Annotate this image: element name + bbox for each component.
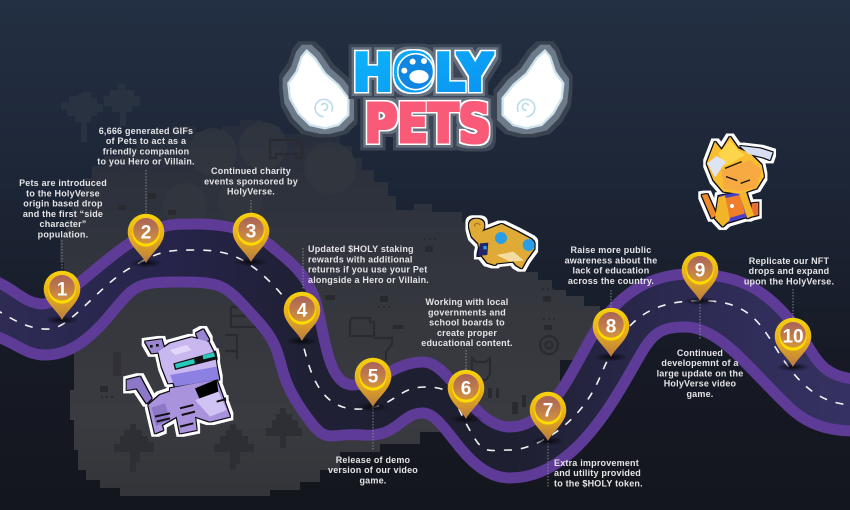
- pin 8: [593, 308, 629, 362]
- milestone 6 text: governments and: [428, 307, 506, 317]
- road lower edge: [0, 282, 850, 478]
- road centre dashes: [0, 250, 850, 451]
- milestone 2 text: friendly companion: [103, 146, 189, 156]
- dotted leader lines: [62, 170, 793, 488]
- milestone 1 text: Pets are introduced: [19, 178, 107, 188]
- pin 9: [682, 252, 718, 306]
- milestone 8 text: awareness about the: [565, 255, 657, 265]
- pin 6: [448, 370, 484, 424]
- milestone 2 text: 6,666 generated GIFs: [99, 126, 193, 136]
- lower trees: [114, 408, 302, 472]
- milestone 3 text: Continued charity: [211, 166, 291, 176]
- small pixel marks: [100, 193, 555, 414]
- ghost icon: [350, 318, 374, 336]
- pin 6: 6: [461, 378, 471, 400]
- pin 5: 5: [368, 366, 379, 388]
- logo wordmark: [353, 44, 493, 155]
- pin 4: [284, 292, 320, 346]
- milestone 8 text: lack of education: [573, 266, 649, 276]
- pin 9: 9: [695, 260, 705, 282]
- background trees and hills: [61, 84, 140, 142]
- milestone 9 text: game.: [686, 389, 714, 399]
- pin 7: 7: [543, 400, 553, 422]
- milestone 10 text: Replicate our NFT: [749, 256, 830, 266]
- controller icon: [270, 140, 302, 158]
- logo wordmark: HOLY: [353, 44, 493, 104]
- logo: [288, 44, 563, 155]
- pin 3: [233, 213, 269, 266]
- milestone 7 text: to the $HOLY token.: [554, 478, 643, 488]
- pin 8: 8: [606, 316, 616, 338]
- road surface: [0, 230, 850, 472]
- milestone 5 text: version of our video: [328, 465, 418, 475]
- milestone 6 text: educational content.: [421, 338, 513, 348]
- island landmass: [60, 120, 600, 496]
- milestone 8 text: across the country.: [568, 276, 654, 286]
- pin 4: 4: [297, 300, 308, 322]
- milestone 5 text: game.: [359, 475, 387, 485]
- digit icon: [225, 335, 237, 359]
- milestone 1 text: character”: [39, 219, 87, 229]
- pin 10: 10: [782, 326, 804, 348]
- milestone 7 text: and utility provided: [554, 468, 641, 478]
- pin 2: [128, 214, 164, 268]
- milestone 9 text: large update on the: [657, 368, 743, 378]
- milestone 1 text: population.: [38, 230, 88, 240]
- spiral icon: [540, 336, 558, 354]
- milestone 3 text: events sponsored by: [204, 176, 298, 186]
- illustration: sleeping orange-haired pet: [702, 137, 773, 227]
- pin 3: 3: [246, 222, 256, 242]
- road upper edge: [0, 224, 850, 427]
- logo left wing: [288, 51, 348, 128]
- milestone 7 text: Extra improvement: [554, 458, 639, 468]
- milestone 4 text: Updated $HOLY staking: [308, 244, 414, 254]
- milestone 9 text: Continued: [677, 348, 723, 358]
- milestone 6 text: school boards to: [429, 318, 505, 328]
- pin 10: [775, 318, 811, 372]
- pin 2: 2: [141, 222, 151, 244]
- pin 1: [44, 271, 80, 324]
- chest icon: [231, 307, 259, 327]
- illustration: purple robot cat: [127, 329, 230, 433]
- logo wordmark: PETS: [365, 93, 491, 155]
- milestone 1 text: and the first “side: [23, 209, 103, 219]
- pin 5: [355, 358, 391, 412]
- logo right wing: [503, 51, 563, 128]
- pixel island background: [60, 84, 600, 496]
- milestone 9 text: developemnt of a: [661, 358, 739, 368]
- milestone 2 text: of Pets to act as a: [106, 136, 187, 146]
- milestone 6 text: Working with local: [426, 297, 508, 307]
- milestone 10 text: drops and expand: [749, 266, 829, 276]
- milestone 1 text: to the HolyVerse: [26, 188, 100, 198]
- illustration: golden chameleon: [469, 219, 535, 268]
- pin 7: [530, 392, 566, 446]
- island pixel icons: [225, 140, 558, 380]
- seven icon: [374, 338, 392, 360]
- milestone 4 text: alongside a Hero or Villain.: [308, 275, 429, 285]
- milestone 6 text: create proper: [437, 328, 497, 338]
- cat face icon: [472, 358, 490, 380]
- milestone 4 text: rewards with additional: [308, 254, 413, 264]
- milestone 9 text: HolyVerse video: [664, 379, 737, 389]
- milestone 8 text: Raise more public: [571, 245, 651, 255]
- milestone 10 text: upon the HolyVerse.: [744, 276, 834, 286]
- milestone 2 text: to you Hero or Villain.: [97, 157, 195, 167]
- paw in letter O: [398, 54, 434, 90]
- milestone 1 text: origin based drop: [23, 199, 103, 209]
- milestone 5 text: Release of demo: [336, 455, 411, 465]
- pin 1: 1: [57, 280, 68, 300]
- road: [0, 218, 850, 484]
- milestone 4 text: returns if you use your Pet: [308, 265, 427, 275]
- milestone 3 text: HolyVerse.: [227, 187, 275, 197]
